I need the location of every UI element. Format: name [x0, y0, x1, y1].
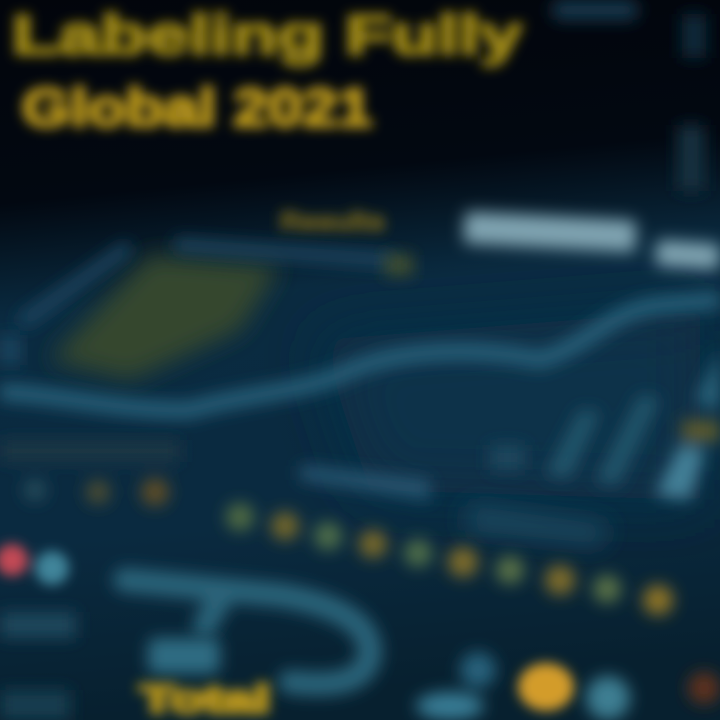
yellow bottom label: Total	[140, 679, 270, 720]
small olive mark	[385, 255, 413, 275]
line chart	[0, 300, 720, 410]
olive map panel	[50, 255, 280, 380]
lower left bar	[0, 612, 76, 638]
flow connector	[125, 580, 370, 684]
faint blue strokes	[25, 245, 390, 320]
bottom left blob	[0, 690, 70, 720]
bottom blue shapes	[416, 652, 496, 720]
panel: lighter dashboard surface	[320, 310, 700, 500]
right column marks	[682, 14, 706, 58]
top right decorations	[552, 0, 706, 191]
caption band	[465, 505, 610, 545]
red and blue badges	[0, 544, 69, 585]
top glow	[552, 0, 638, 20]
title line 1: Labeling Fully	[12, 3, 522, 66]
middle caption	[300, 465, 430, 500]
panel heading: white label	[463, 212, 720, 270]
bars at right	[490, 350, 720, 500]
title line 2: Global 2021	[22, 78, 372, 138]
bar group	[545, 410, 600, 478]
left legend dots	[0, 440, 180, 506]
left edge marker	[0, 335, 20, 365]
title	[12, 3, 522, 138]
row of dots	[226, 503, 673, 615]
dark orange circle	[688, 672, 720, 704]
orange circle	[518, 663, 574, 711]
panel heading: small yellow label: Results	[280, 206, 385, 236]
blue circle	[586, 676, 630, 720]
flow box	[148, 638, 220, 674]
